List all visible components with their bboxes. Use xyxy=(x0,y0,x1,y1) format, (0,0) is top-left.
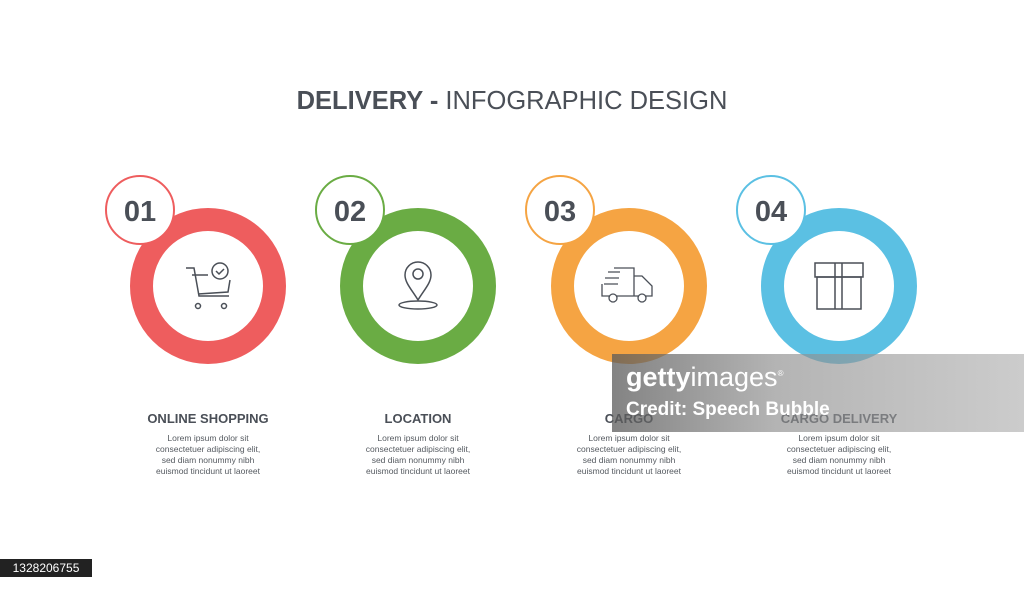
text: cargo: CARGO xyxy=(605,411,653,426)
title: DELIVERY - INFOGRAPHIC DESIGN xyxy=(297,87,727,115)
text: location: consectetuer adipiscing elit, xyxy=(366,444,470,454)
text: cargo delivery xyxy=(781,411,897,476)
text: location: euismod tincidunt ut laoreet xyxy=(366,466,470,476)
step 3 badge: 03 xyxy=(544,196,576,228)
icon: box xyxy=(815,263,863,309)
step 4 badge xyxy=(737,176,805,244)
text: cargo delivery: euismod tincidunt ut laoreet xyxy=(787,466,891,476)
text: online shopping: euismod tincidunt ut laoreet xyxy=(156,466,260,476)
image id tag: 1328206755 xyxy=(13,561,79,575)
step 2 badge xyxy=(316,176,384,244)
step 2 badge: 02 xyxy=(334,196,366,228)
text: location: sed diam nonummy nibh xyxy=(372,455,464,465)
image id tag xyxy=(0,559,92,577)
text: location: Lorem ipsum dolor sit xyxy=(377,433,459,443)
icon: cart xyxy=(186,263,230,308)
text: cargo delivery: consectetuer adipiscing elit, xyxy=(787,444,891,454)
step 4 ring xyxy=(772,220,906,352)
step 2 ring xyxy=(352,220,484,352)
text: cargo: consectetuer adipiscing elit, xyxy=(577,444,681,454)
text: location xyxy=(366,411,470,476)
text: online shopping: Lorem ipsum dolor sit xyxy=(167,433,249,443)
text: cargo delivery: sed diam nonummy nibh xyxy=(793,455,885,465)
step 4 badge: 04 xyxy=(755,196,787,228)
icon: location pin xyxy=(399,262,437,309)
text: online shopping: ONLINE SHOPPING xyxy=(147,411,269,426)
text: online shopping: sed diam nonummy nibh xyxy=(162,455,254,465)
text: cargo delivery: CARGO DELIVERY xyxy=(781,411,897,426)
text: cargo: euismod tincidunt ut laoreet xyxy=(577,466,681,476)
text: cargo delivery: Lorem ipsum dolor sit xyxy=(798,433,880,443)
text: online shopping xyxy=(147,411,269,476)
watermark banner xyxy=(612,354,1024,432)
step 3 ring xyxy=(562,220,696,352)
watermark banner: Credit: Speech Bubble xyxy=(626,399,830,420)
text: location: LOCATION xyxy=(385,411,451,426)
step 1 badge: 01 xyxy=(124,196,156,228)
step 3 badge xyxy=(526,176,594,244)
text: cargo xyxy=(577,411,681,476)
step 1 badge xyxy=(106,176,174,244)
text: cargo: sed diam nonummy nibh xyxy=(583,455,675,465)
text: online shopping: consectetuer adipiscing elit, xyxy=(156,444,260,454)
text: cargo: Lorem ipsum dolor sit xyxy=(588,433,670,443)
watermark banner: gettyimages® xyxy=(626,362,783,392)
step 1 ring xyxy=(142,220,274,352)
icon: truck xyxy=(602,268,652,302)
